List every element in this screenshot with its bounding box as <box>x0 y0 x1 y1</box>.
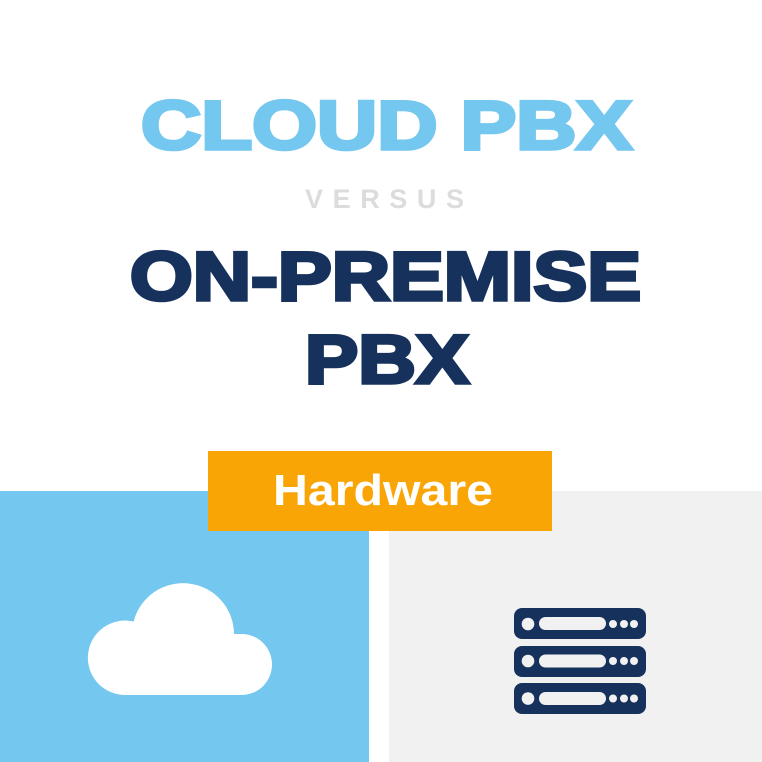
label: Hardware: Hardware <box>273 466 493 515</box>
icon: cloud <box>88 583 272 695</box>
text: versus: VERSUS <box>305 184 464 214</box>
title: PBX: PBX <box>305 321 469 398</box>
panel: on-premise side <box>389 491 762 762</box>
icon: server rack <box>514 608 646 714</box>
title: Cloud PBX: CLOUD PBX <box>141 87 632 164</box>
panel: cloud side <box>0 491 369 762</box>
title: On-Premise: ON-PREMISE <box>130 238 641 315</box>
label: Hardware <box>208 451 552 531</box>
